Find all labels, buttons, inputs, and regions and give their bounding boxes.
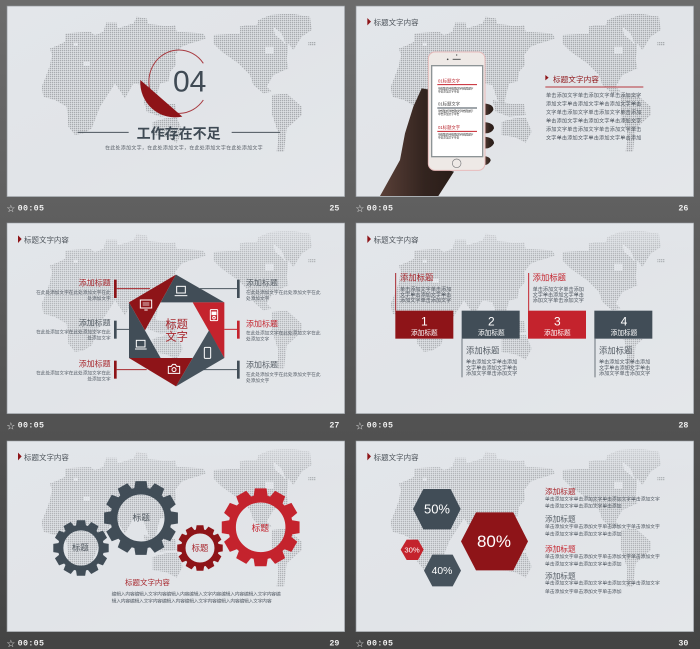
item 3: 单击添加文字单击添加 xyxy=(533,285,584,293)
item 4: 添加标题 xyxy=(599,345,633,355)
text block: 文字单击添加文字单击添加文字单击添加 xyxy=(546,108,641,116)
gear: large dark xyxy=(104,481,178,555)
slide 29: gears xyxy=(6,441,345,649)
left items: 在此处添加文字在此处添加文字在此 xyxy=(36,289,111,296)
item 4: 单击添加文字单击添加 xyxy=(599,358,650,366)
item 2: 文字单击添加文字单击 xyxy=(466,364,517,372)
item 1: 单击添加文字单击添加 xyxy=(400,285,451,293)
icon: laptop xyxy=(135,340,147,349)
left items: 处添加文字 xyxy=(87,335,111,342)
footer: 00:05 xyxy=(367,638,393,648)
footer: 00:05 xyxy=(18,638,44,648)
text block: 单击添加文字单击添加文字单击添加文字 xyxy=(546,91,641,99)
right items: 处添加文字 xyxy=(246,377,270,384)
item 4: 4 xyxy=(621,315,628,329)
gear: small dark xyxy=(53,520,109,576)
item list: 添加标题 xyxy=(545,513,576,523)
right items: 在此处添加文字在此处添加文字在此 xyxy=(246,371,321,378)
slide 26: phone in hand xyxy=(355,6,694,215)
icon: laptop xyxy=(175,286,187,296)
item list: 添加标题 xyxy=(545,571,576,581)
footer: 27 xyxy=(329,421,339,431)
footer: 00:05 xyxy=(367,203,393,213)
title: 工作存在不足 xyxy=(137,125,221,141)
world map xyxy=(42,230,316,369)
center label: 文字 xyxy=(165,330,188,344)
right items: 处添加文字 xyxy=(246,335,270,342)
center label: 标题 xyxy=(165,318,188,331)
item 3 xyxy=(528,272,586,339)
footer xyxy=(6,638,339,649)
left items: 添加标题 xyxy=(79,277,111,287)
item 4: 文字单击添加文字单击 xyxy=(599,364,650,372)
item list: 单击添加文字单击添加文字单击添加文字单击添加文字 xyxy=(545,553,660,560)
left items: 处添加文字 xyxy=(87,375,111,382)
hexagon: 40%: 40% xyxy=(432,566,452,577)
gear: small dark: 标题 xyxy=(72,543,89,553)
item list: 单击添加文字单击添加文字单击添加 xyxy=(545,503,622,510)
item 2: 添加文字单击添加文字 xyxy=(466,369,517,377)
slide 28: four numbered boxes xyxy=(355,223,694,432)
gear: small crimson xyxy=(177,525,223,571)
hexagon: 50% xyxy=(413,489,461,529)
text block: 文字单击添加文字单击添加文字单击添加 xyxy=(546,134,641,142)
item 3: 文字单击添加文字单击 xyxy=(533,291,584,299)
subtitle: 在此处添加文字，在此处添加文字，在此处添加文字在此处添加文字 xyxy=(105,144,263,151)
phone list: 单击添加文字单击添加文字单击添加文字 xyxy=(438,86,474,90)
footer: 00:05 xyxy=(18,203,44,213)
right items xyxy=(237,277,321,384)
footer: 26 xyxy=(678,203,688,213)
footer xyxy=(355,203,688,215)
item 2: 2 xyxy=(488,315,495,329)
gear: small crimson: 标题 xyxy=(192,543,209,553)
footer xyxy=(6,203,339,215)
text block: 标题文字内容 xyxy=(553,74,599,84)
phone list: 01标题文字 xyxy=(438,124,461,131)
footer: 29 xyxy=(329,638,339,648)
item list: 单击添加文字单击添加文字单击添加 xyxy=(545,560,622,567)
phone list: 单击添加文字单击 xyxy=(438,89,460,93)
gear: large dark: 标题 xyxy=(133,512,150,523)
item list: 单击添加文字单击添加文字单击添加文字单击添加文字 xyxy=(545,495,660,502)
world map xyxy=(42,13,316,152)
footer xyxy=(6,421,339,432)
item 3: 添加标题 xyxy=(544,328,571,337)
item list: 单击添加文字单击添加文字单击添加文字单击添加文字 xyxy=(545,523,660,530)
left items: 处添加文字 xyxy=(87,295,111,302)
right items: 添加标题 xyxy=(246,360,278,370)
slide 25: section cover xyxy=(6,6,345,215)
left items: 添加标题 xyxy=(79,358,111,368)
hexagon xyxy=(129,275,224,386)
item list: 单击添加文字单击添加文字单击添加文字单击添加文字 xyxy=(545,580,660,587)
item list: 添加标题 xyxy=(545,486,576,496)
item 4: 添加文字单击添加文字 xyxy=(599,369,650,377)
hexagon: 80%: 80% xyxy=(477,532,511,551)
item 1: 文字单击添加文字单击 xyxy=(400,291,451,299)
world map xyxy=(391,230,665,369)
item list: 单击添加文字单击添加文字单击添加 xyxy=(545,588,622,595)
phone list: 01标题文字 xyxy=(438,100,461,107)
phone list xyxy=(437,77,477,139)
caption: 标题文字内容 xyxy=(125,577,170,587)
left items xyxy=(36,277,117,382)
hand xyxy=(380,88,494,196)
item 2: 单击添加文字单击添加 xyxy=(466,358,517,366)
circle outline xyxy=(149,50,203,113)
hexagon: 50%: 50% xyxy=(424,501,450,516)
header: 标题文字内容 xyxy=(374,234,419,244)
item 1: 添加标题 xyxy=(411,328,438,337)
footer xyxy=(355,421,688,432)
slide 27: hexagon diagram xyxy=(6,223,345,432)
phone list: 单击添加文字单击 xyxy=(438,112,460,116)
gear: large red xyxy=(222,488,300,566)
item 1: 1 xyxy=(421,315,428,329)
gear: large red: 标题 xyxy=(252,522,269,533)
right items: 在此处添加文字在此处添加文字在此 xyxy=(246,289,321,296)
phone list: 单击添加文字单击 xyxy=(438,135,460,139)
phone list: 单击添加文字单击添加文字单击添加文字 xyxy=(438,109,474,113)
caption: 编辑入内容编辑入文字内容编辑入内容编辑入文字内容编辑入内容编辑入文字内容编 xyxy=(112,591,281,598)
item 1 xyxy=(395,272,453,339)
icon: music player xyxy=(210,310,218,321)
hexagon: 30%: 30% xyxy=(404,545,420,554)
right items: 添加标题 xyxy=(246,277,278,287)
right items: 在此处添加文字在此处添加文字在此 xyxy=(246,329,321,336)
header: 标题文字内容 xyxy=(374,17,419,27)
footer: 00:05 xyxy=(18,421,44,431)
hexagon: 30% xyxy=(401,540,424,560)
text block: 单击添加文字单击添加文字单击添加文字 xyxy=(546,117,641,125)
section number: 04 xyxy=(173,65,206,98)
item 3: 3 xyxy=(554,315,561,329)
text block: 添加文字单击添加文字单击添加文字单击 xyxy=(546,99,641,107)
footer: 00:05 xyxy=(367,421,393,431)
right items: 添加标题 xyxy=(246,318,278,328)
center label xyxy=(165,318,188,344)
item 2: 添加标题 xyxy=(466,345,500,355)
phone list: 01标题文字 xyxy=(438,77,461,84)
right items: 处添加文字 xyxy=(246,295,270,302)
red circle segment xyxy=(140,80,182,117)
hexagon: 40% xyxy=(424,555,461,586)
text block xyxy=(545,74,643,142)
title rules xyxy=(78,131,280,134)
footer: ☆ xyxy=(355,204,364,215)
world map xyxy=(391,448,665,587)
header: 标题文字内容 xyxy=(374,452,419,462)
caption: 辑入内容编辑入文字内容编辑入内容编辑入文字内容编辑入内容编辑入文字内容 xyxy=(112,597,272,604)
text block: 添加文字单击添加文字单击添加文字单击 xyxy=(546,125,641,133)
left items: 添加标题 xyxy=(79,318,111,328)
connectors xyxy=(117,289,237,370)
item 3: 添加文字单击添加文字 xyxy=(533,296,584,304)
icon: phone xyxy=(204,347,211,358)
footer: ☆ xyxy=(355,421,364,432)
footer: ☆ xyxy=(6,421,15,432)
phone list: 单击添加文字单击添加文字单击添加文字 xyxy=(438,132,474,136)
footer: ☆ xyxy=(6,204,15,215)
item 4: 添加标题 xyxy=(611,328,638,337)
phone xyxy=(428,52,485,170)
caption xyxy=(112,577,281,604)
left items: 在此处添加文字在此处添加文字在此 xyxy=(36,329,111,336)
slide 30: percentage hexagons xyxy=(355,441,694,649)
item list: 单击添加文字单击添加文字单击添加 xyxy=(545,530,622,537)
footer: 30 xyxy=(678,638,688,648)
item 2 xyxy=(462,311,520,377)
item list xyxy=(545,486,660,595)
hexagon: 80% xyxy=(461,512,528,570)
item 4 xyxy=(594,311,652,377)
world map xyxy=(391,13,665,152)
left items: 在此处添加文字在此处添加文字在此 xyxy=(36,369,111,376)
icon: camera xyxy=(168,364,180,373)
world map xyxy=(42,448,316,587)
item 2: 添加标题 xyxy=(478,328,505,337)
header: 标题文字内容 xyxy=(24,452,69,462)
item 1: 添加标题 xyxy=(400,272,434,282)
footer: 25 xyxy=(329,203,339,213)
icon: monitor xyxy=(140,300,152,310)
footer: 28 xyxy=(678,421,688,431)
item list: 添加标题 xyxy=(545,543,576,553)
item 3: 添加标题 xyxy=(533,272,567,282)
item 1: 添加文字单击添加文字 xyxy=(400,296,451,304)
header: 标题文字内容 xyxy=(24,234,69,244)
footer xyxy=(355,638,688,649)
